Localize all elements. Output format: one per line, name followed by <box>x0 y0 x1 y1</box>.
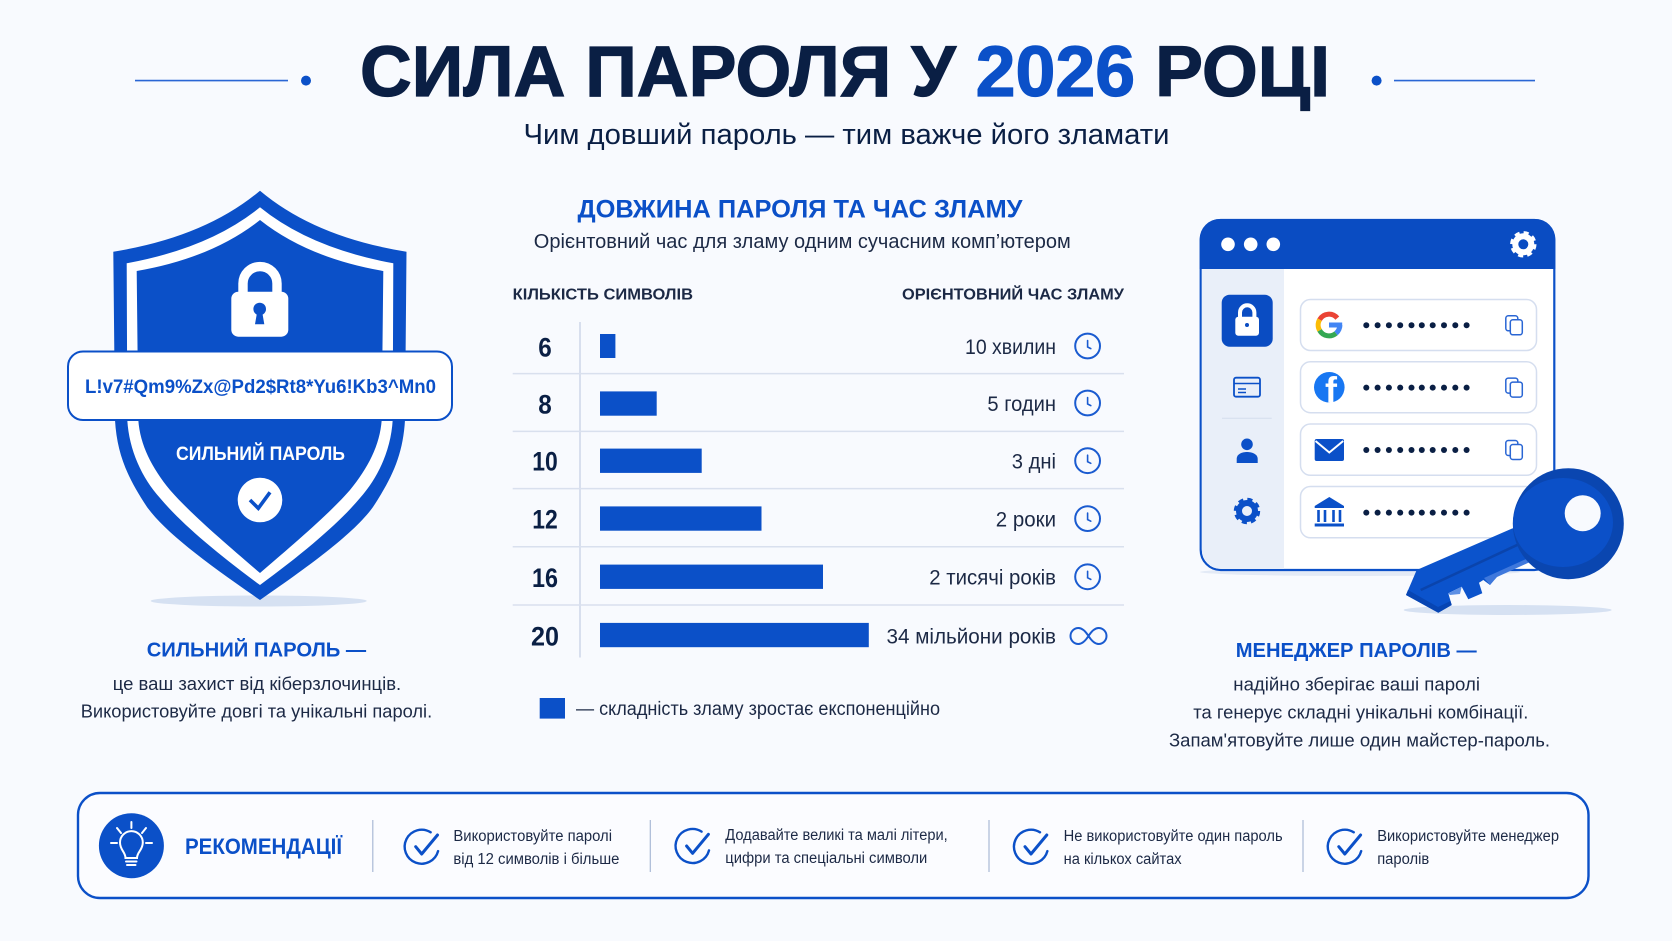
column headers: ОРІЄНТОВНИЙ ЧАС ЗЛАМУ <box>902 285 1125 304</box>
panel: bar chart <box>513 196 1125 720</box>
caption: password manager <box>1169 639 1550 751</box>
tip 3: Не використовуйте один пароль <box>1064 828 1283 845</box>
row: 6 characters: 10 хвилин <box>965 336 1056 359</box>
shield label: СИЛЬНИЙ ПАРОЛЬ <box>176 443 345 465</box>
row: 10 characters <box>532 446 1100 476</box>
sidebar icon: lock <box>1222 295 1273 347</box>
entry: bank <box>1300 486 1536 538</box>
sidebar icon: user <box>1237 438 1258 463</box>
row: 20 characters: 34 мільйони років <box>886 626 1056 648</box>
icon: key <box>1406 468 1624 613</box>
tip 1: від 12 символів і більше <box>453 851 619 868</box>
row: 12 characters: 2 роки <box>996 508 1056 532</box>
entry: facebook <box>1300 362 1536 413</box>
caption: password manager: МЕНЕДЖЕР ПАРОЛІВ — <box>1236 639 1477 662</box>
column headers <box>513 285 1125 304</box>
caption: strong password: СИЛЬНИЙ ПАРОЛЬ — <box>147 638 367 662</box>
panel: recommendations <box>78 793 1588 898</box>
tip 3 <box>1014 828 1283 868</box>
caption: strong password: Використовуйте довгі та унікальні паролі. <box>81 700 432 722</box>
row: 20 characters: 20 <box>531 622 559 652</box>
sidebar icon: card <box>1234 378 1260 397</box>
chart subheading: Орієнтовний час для зламу одним сучасним комп’ютером <box>534 231 1071 253</box>
row: 6 characters <box>538 332 1100 362</box>
chart heading: ДОВЖИНА ПАРОЛЯ ТА ЧАС ЗЛАМУ <box>578 196 1023 224</box>
entry: facebook: f <box>1325 370 1338 410</box>
chart legend: — складність зламу зростає експоненційно <box>576 699 940 720</box>
row: 8 characters: 8 <box>538 390 552 420</box>
tip 4: паролів <box>1377 851 1429 868</box>
row: 6 characters: 6 <box>538 332 552 362</box>
caption: password manager: та генерує складні унікальні комбінації. <box>1193 701 1528 722</box>
icon: check badge <box>238 478 282 522</box>
password box: L!v7#Qm9%Zx@Pd2$Rt8*Yu6!Kb3^Mn0 <box>85 376 436 398</box>
row: 8 characters <box>538 390 1100 420</box>
tip 1: Використовуйте паролі <box>453 828 612 845</box>
row: 20 characters <box>531 622 1106 652</box>
column headers: КІЛЬКІСТЬ СИМВОЛІВ <box>513 287 693 304</box>
caption: strong password <box>81 638 432 722</box>
row: 12 characters <box>532 504 1100 534</box>
tip 3: на кількох сайтах <box>1064 851 1182 868</box>
title: СИЛА ПАРОЛЯ У 2026 РОЦІ <box>360 33 1330 112</box>
header <box>135 33 1535 151</box>
row: 10 characters: 10 <box>532 446 558 476</box>
key shadow <box>1404 605 1612 615</box>
row: 10 characters: 3 дні <box>1012 450 1056 474</box>
row: 16 characters: 2 тисячі років <box>929 566 1056 590</box>
recommendations heading: РЕКОМЕНДАЦІЇ <box>185 834 343 859</box>
sidebar icon: settings <box>1236 500 1258 522</box>
subtitle: Чим довший пароль — тим важче його зламати <box>524 119 1170 151</box>
shield shadow <box>151 596 367 606</box>
icon: light bulb <box>99 813 164 878</box>
tip 1 <box>405 828 619 868</box>
tip 4 <box>1328 828 1559 868</box>
caption: password manager: Запам'ятовуйте лише один майстер-пароль. <box>1169 730 1550 751</box>
window shadow <box>1200 568 1520 576</box>
caption: strong password: це ваш захист від кіберзлочинців. <box>113 673 401 694</box>
tip 4: Використовуйте менеджер <box>1377 828 1559 845</box>
caption: password manager: надійно зберігає ваші паролі <box>1233 674 1480 695</box>
password box <box>68 352 452 420</box>
icon: shield <box>113 191 407 600</box>
row: 8 characters: 5 годин <box>987 393 1056 416</box>
row: 12 characters: 12 <box>532 504 558 534</box>
entry: google <box>1300 300 1536 350</box>
panel: strong password <box>68 191 452 721</box>
panel: password manager <box>1169 219 1624 751</box>
entry: mail <box>1300 424 1536 475</box>
row: 16 characters: 16 <box>532 563 558 593</box>
app window <box>1200 219 1555 570</box>
tip 2: Додавайте великі та малі літери, <box>725 827 948 844</box>
tip 2 <box>676 827 948 867</box>
icon: padlock <box>231 267 288 337</box>
row: 16 characters <box>532 563 1100 593</box>
tip 2: цифри та спеціальні символи <box>725 850 927 867</box>
